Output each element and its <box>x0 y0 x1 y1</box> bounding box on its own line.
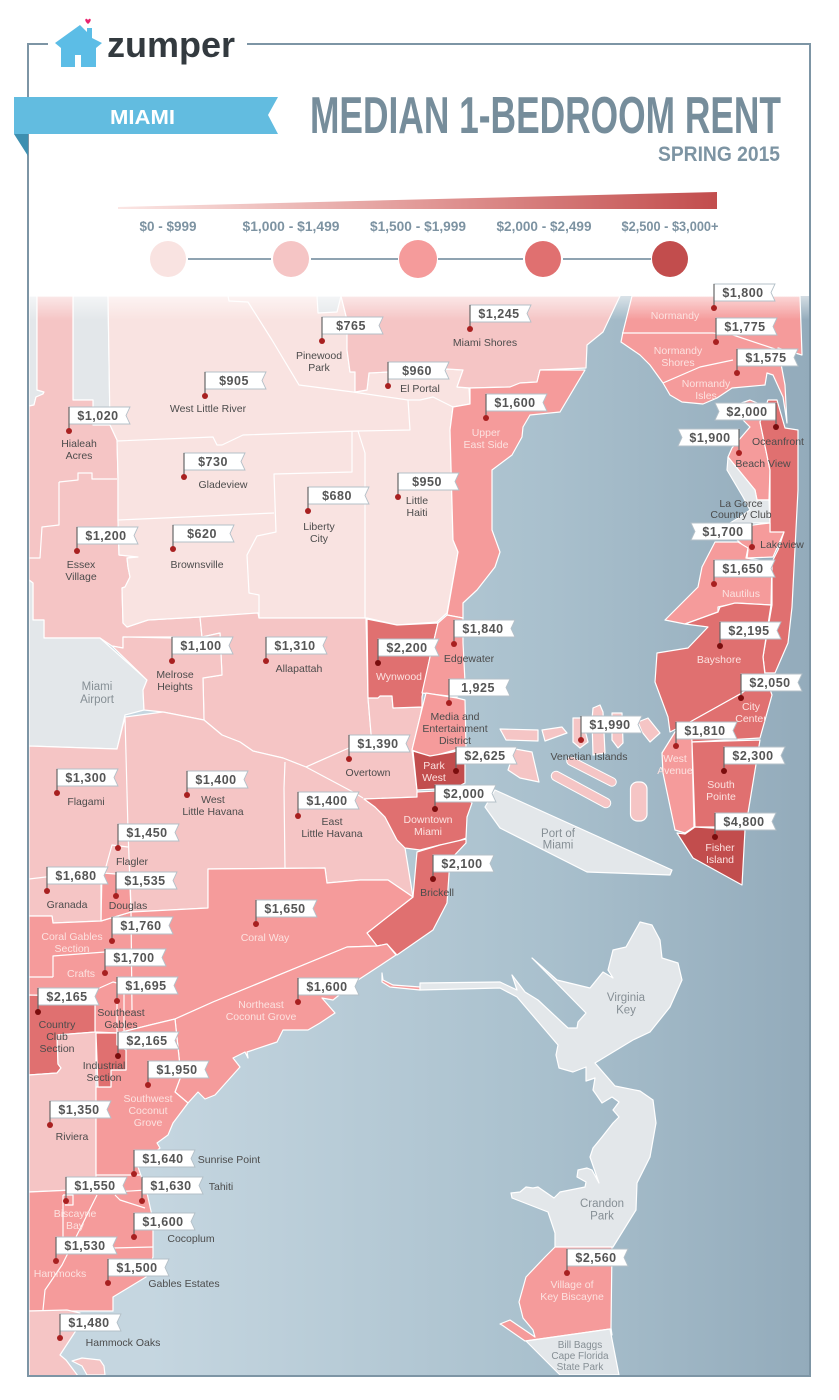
flag: Hammocks <box>53 1237 117 1264</box>
region: inlet strip <box>382 973 420 990</box>
region: Virginia Key and Crandon Park <box>420 922 682 1247</box>
label: South Pointe: South <box>707 779 735 791</box>
label: Industrial Section: Section <box>86 1072 122 1084</box>
label: Bill Baggs Cape Florida State Park: Cape Florida <box>551 1351 609 1362</box>
flag: Nautilus <box>711 560 775 587</box>
label: Bill Baggs Cape Florida State Park: State Park <box>557 1362 604 1373</box>
flag: Brickell <box>430 855 494 882</box>
label: Port of Miami: Miami <box>543 840 573 852</box>
flag: Douglas: $1,535 <box>124 874 166 888</box>
flag: Flagler: $1,450 <box>126 826 168 840</box>
flag: West Little Havana: $1,400 <box>195 773 237 787</box>
region: under $1000 north-central districts <box>108 296 470 627</box>
flag: Miami Shores <box>467 305 531 332</box>
label: Gables Estates: Gables Estates <box>148 1278 220 1290</box>
flag: Melrose Heights <box>169 637 233 664</box>
region: Melrose Heights <box>112 633 222 720</box>
flag: East Little Havana <box>295 792 359 819</box>
flag: Coral Gables Section: $1,760 <box>120 919 162 933</box>
label: Gladeview: Gladeview <box>198 479 248 491</box>
flag: Granada: $1,680 <box>55 869 97 883</box>
flag: Normandy: $1,800 <box>722 286 764 300</box>
flag: Melrose Heights: $1,100 <box>180 639 222 653</box>
legend item: $2,000 - $2,499: $2,000 - $2,499 <box>496 218 592 234</box>
region: Country Club Section <box>29 995 95 1075</box>
label: Melrose Heights: Melrose <box>156 669 194 681</box>
flag: Industrial Section <box>115 1032 179 1059</box>
flag: West Little River: $905 <box>219 374 249 388</box>
region: grey north-west areas <box>29 296 44 406</box>
flag: Cocoplum: $1,600 <box>142 1215 184 1229</box>
label: Virginia Key: Key <box>616 1004 636 1016</box>
flag: Oceanfront <box>715 403 779 430</box>
label: Country Club Section: Club <box>46 1031 68 1043</box>
wordmark: zumper <box>107 24 235 65</box>
label: Coral Gables Section: Coral Gables <box>41 931 103 943</box>
flag: Fisher Island: $4,800 <box>723 815 765 829</box>
region: grey patch above Pinewood Park <box>317 296 341 313</box>
flag: Riviera: $1,350 <box>58 1103 100 1117</box>
label: Normandy Shores: Shores <box>661 357 695 369</box>
label: Essex Village: Essex <box>67 559 95 571</box>
flag: Park West <box>453 747 517 774</box>
flag: Allapattah <box>263 637 327 664</box>
flag: Hialeah Acres <box>66 407 130 434</box>
label: West Avenue: Avenue <box>657 765 693 777</box>
region: Beach View <box>728 400 770 500</box>
flag: Fisher Island <box>712 813 776 840</box>
region: Northeast Coconut Grove <box>175 944 396 1103</box>
logo: zumper <box>55 19 235 67</box>
label: Oceanfront: Oceanfront <box>752 436 804 448</box>
flag: Tahiti <box>139 1177 203 1204</box>
flag: Douglas <box>113 872 177 899</box>
flag: Pinewood Park <box>319 317 383 344</box>
label: Little Haiti: Haiti <box>406 507 428 519</box>
flag: West Avenue: $1,810 <box>684 724 726 738</box>
flag: West Little River <box>202 372 266 399</box>
label: Southeast Gables: Gables <box>104 1019 138 1031</box>
region: Village of Key Biscayne <box>500 1247 612 1341</box>
region: Coral Way and Coral Gables <box>29 868 413 1033</box>
flag: Country Club Section <box>35 988 99 1015</box>
flag: Crafts <box>102 949 166 976</box>
flag: Normandy <box>711 284 775 311</box>
label: Riviera: Riviera <box>56 1131 88 1143</box>
legend item: $0 - $999 <box>140 218 197 277</box>
legend item: $2,500 - $3,000+ <box>622 218 718 277</box>
flag: Industrial Section: $2,165 <box>126 1034 168 1048</box>
label: Crafts: Crafts <box>67 968 95 980</box>
label: Pinewood Park: Pinewood <box>296 350 342 362</box>
flag: Gables Estates: $1,500 <box>116 1261 158 1275</box>
region: South Pointe <box>692 740 760 830</box>
flag: Flagler <box>115 824 179 851</box>
flag: Liberty City: $680 <box>322 489 352 503</box>
region: Downtown Miami <box>364 790 472 850</box>
flag: Crafts: $1,700 <box>113 951 155 965</box>
label: Virginia Key: Virginia <box>607 992 645 1004</box>
flag: City Center <box>738 674 802 701</box>
subtitle: SPRING 2015 <box>658 143 780 166</box>
map: price flags <box>35 284 802 1341</box>
flag: Venetian Islands <box>578 716 642 743</box>
label: Flagler: Flagler <box>116 856 149 868</box>
flag: El Portal <box>385 362 449 389</box>
label: Tahiti: Tahiti <box>209 1181 233 1193</box>
label: Hammocks: Hammocks <box>34 1268 86 1280</box>
label: Little Haiti: Little <box>406 495 428 507</box>
flag: Edgewater <box>451 620 515 647</box>
label: Granada: Granada <box>47 899 88 911</box>
label: East Little Havana: Little Havana <box>301 828 363 840</box>
flag: Gladeview: $730 <box>198 455 228 469</box>
region: Wynwood <box>367 619 438 708</box>
label: Industrial Section: Industrial <box>83 1060 125 1072</box>
label: La Gorce Country Club: La Gorce <box>719 498 763 510</box>
region: Nautilus <box>665 542 772 624</box>
label: Lakeview: Lakeview <box>760 539 804 551</box>
map: neighbourhood regions <box>29 296 802 1376</box>
label: Upper East Side: East Side <box>464 439 509 451</box>
label: Normandy Isles: Normandy <box>682 378 730 390</box>
label: West Avenue: West <box>663 753 687 765</box>
label: Fisher Island: Fisher <box>705 842 735 854</box>
label: Park West: West <box>422 772 446 784</box>
flag: Southeast Gables <box>114 977 178 1004</box>
flag: Wynwood <box>375 639 439 666</box>
label: Normandy: Normandy <box>651 310 700 322</box>
flag: Southwest Coconut Grove <box>145 1061 209 1088</box>
label: Miami Shores: Miami Shores <box>453 337 517 349</box>
flag: Biscayne Bay: $1,550 <box>74 1179 116 1193</box>
flag: West Little Havana <box>184 771 248 798</box>
flag: Tahiti: $1,630 <box>150 1179 192 1193</box>
legend: price scale <box>140 218 718 278</box>
flag: South Pointe: $2,300 <box>732 749 774 763</box>
label: Bayshore: Bayshore <box>697 654 741 666</box>
flag: Miami Shores: $1,245 <box>478 307 520 321</box>
flag: Gables Estates <box>105 1259 169 1286</box>
label: Media and Entertainment District: Media and <box>430 711 480 723</box>
label: Hialeah Acres: Hialeah <box>61 438 97 450</box>
label: City Center: City <box>742 701 760 713</box>
ribbon: Miami <box>14 97 278 156</box>
flag: East Little Havana: $1,400 <box>306 794 348 808</box>
flag: Normandy Shores: $1,775 <box>724 320 766 334</box>
flag: South Pointe <box>721 747 785 774</box>
map: neighbourhood labels <box>34 310 804 1373</box>
label: Normandy Shores: Normandy <box>654 345 702 357</box>
map: water background <box>28 296 810 1376</box>
region: Media and Entertainment District <box>412 693 466 757</box>
map: fade at top edge <box>29 296 809 320</box>
flag: Country Club Section: $2,165 <box>46 990 88 1004</box>
label: Pinewood Park: Park <box>308 362 331 374</box>
legend item: $0 - $999: $0 - $999 <box>140 218 197 234</box>
label: Essex Village: Village <box>65 571 97 583</box>
region: Bayshore <box>655 603 771 732</box>
region: Douglas <box>101 873 131 921</box>
label: Liberty City: Liberty <box>303 521 335 533</box>
region: Normandy group <box>621 296 802 423</box>
region: Hammock Oaks <box>29 1310 80 1376</box>
ribbon: Miami: MIAMI <box>110 106 175 129</box>
flag: Venetian Islands: $1,990 <box>589 718 631 732</box>
flag: Hialeah Acres: $1,020 <box>77 409 119 423</box>
label: Edgewater: Edgewater <box>444 653 495 665</box>
flag: Coral Way <box>253 900 317 927</box>
label: Coral Gables Section: Section <box>54 943 90 955</box>
flag: Normandy Isles <box>734 349 798 376</box>
label: Crandon Park: Crandon <box>580 1198 624 1210</box>
region: Allapattah <box>200 613 372 767</box>
region: Bill Baggs Cape Florida State Park <box>526 1329 619 1375</box>
region: Fisher Island <box>677 827 745 885</box>
flag: Flagami: $1,300 <box>65 771 107 785</box>
label: West Little Havana: Little Havana <box>182 806 244 818</box>
label: Hammock Oaks: Hammock Oaks <box>86 1337 160 1349</box>
label: Port of Miami: Port of <box>541 828 575 840</box>
flag: Cocoplum <box>131 1213 195 1240</box>
label: Liberty City: City <box>310 533 329 545</box>
flag: Oceanfront: $2,000 <box>726 405 768 419</box>
label: East Little Havana: East <box>321 816 343 828</box>
label: Normandy Isles: Isles <box>695 390 717 402</box>
label: Village of Key Biscayne: Key Biscayne <box>540 1291 604 1303</box>
region: La Gorce Country Club <box>727 457 770 523</box>
region: Miami Airport <box>29 580 147 749</box>
label: Miami Airport: Airport <box>80 694 115 706</box>
label: West Little River: West Little River <box>170 403 247 415</box>
label: Coral Way: Coral Way <box>241 932 290 944</box>
label: La Gorce Country Club: Country Club <box>710 509 772 521</box>
label: Venetian Islands: Venetian Islands <box>550 751 628 763</box>
flag: Village of Key Biscayne: $2,560 <box>575 1251 617 1265</box>
label: Southeast Gables: Southeast <box>97 1007 145 1019</box>
flag: Bayshore <box>717 622 781 649</box>
label: Melrose Heights: Heights <box>157 681 193 693</box>
label: Upper East Side: Upper <box>472 427 500 439</box>
label: Country Club Section: Country <box>39 1019 75 1031</box>
flag: El Portal: $960 <box>402 364 432 378</box>
flag: Nautilus: $1,650 <box>722 562 764 576</box>
flag: Gladeview <box>181 453 245 480</box>
label: City Center: Center <box>735 713 767 725</box>
region: City Center <box>690 675 772 742</box>
label: Brownsville: Brownsville <box>170 559 224 571</box>
flag: Little Haiti <box>395 473 459 500</box>
flag: Lakeview: $1,700 <box>702 525 744 539</box>
flag: Normandy Shores <box>713 318 777 345</box>
flag: Pinewood Park: $765 <box>336 319 366 333</box>
flag: Essex Village: $1,200 <box>85 529 127 543</box>
label: Biscayne Bay: Biscayne <box>54 1208 96 1220</box>
flag: Upper East Side: $1,600 <box>494 396 536 410</box>
label: Flagami: Flagami <box>67 796 105 808</box>
flag: Hammock Oaks: $1,480 <box>68 1316 110 1330</box>
flag: Hammock Oaks <box>57 1314 121 1341</box>
region: Brickell <box>367 839 466 955</box>
legend item: $1,000 - $1,499: $1,000 - $1,499 <box>242 218 340 234</box>
region: Upper East Side <box>447 370 585 618</box>
flag: Sunrise Point: $1,640 <box>142 1152 184 1166</box>
label: Miami Airport: Miami <box>82 681 112 693</box>
label: Downtown Miami: Downtown <box>403 814 453 826</box>
region: south coastal neighbourhoods <box>29 1019 188 1311</box>
map: neighbourhood boundary lines <box>29 296 778 1310</box>
flag: Northeast Coconut Grove <box>295 978 359 1005</box>
region: Edgewater <box>422 615 465 697</box>
label: Park West: Park <box>423 760 445 772</box>
flag: Downtown Miami <box>432 785 496 812</box>
flag: Village of Key Biscayne <box>564 1249 628 1276</box>
region: Industrial Section <box>96 1033 126 1087</box>
region: Hialeah Acres and Essex Village <box>29 296 202 648</box>
label: Southwest Coconut Grove: Coconut <box>128 1105 168 1117</box>
flag: Riviera <box>47 1101 111 1128</box>
legend: gradient wedge <box>118 192 717 209</box>
flag: West Avenue <box>673 722 737 749</box>
flag: Downtown Miami: $2,000 <box>443 787 485 801</box>
label: Bill Baggs Cape Florida State Park: Bill Baggs <box>558 1340 602 1351</box>
flag: Coral Gables Section <box>109 917 173 944</box>
region: Park West <box>413 748 465 790</box>
flag: Liberty City <box>305 487 369 514</box>
label: Media and Entertainment District: Entertainment <box>422 723 488 735</box>
flag: Northeast Coconut Grove: $1,600 <box>306 980 348 994</box>
flag: Coral Way: $1,650 <box>264 902 306 916</box>
region: coastal islet <box>72 1358 105 1375</box>
flag: Granada <box>44 867 108 894</box>
label: Village of Key Biscayne: Village of <box>550 1279 594 1291</box>
label: Overtown: Overtown <box>346 767 391 779</box>
flag: Edgewater: $1,840 <box>462 622 504 636</box>
flag: Little Haiti: $950 <box>412 475 442 489</box>
label: Country Club Section: Section <box>39 1043 75 1055</box>
label: Northeast Coconut Grove: Northeast <box>238 999 284 1011</box>
label: Crandon Park: Park <box>590 1210 614 1222</box>
flag: Upper East Side <box>483 394 547 421</box>
label: Brickell: Brickell <box>420 887 454 899</box>
legend item: $1,000 - $1,499 <box>242 218 340 277</box>
flag: Brownsville: $620 <box>187 527 217 541</box>
flag: Southeast Gables: $1,695 <box>125 979 167 993</box>
label: Southwest Coconut Grove: Grove <box>134 1117 162 1129</box>
label: Wynwood: Wynwood <box>376 671 422 683</box>
flag: Beach View <box>678 429 742 456</box>
icon: house with heart <box>55 19 102 67</box>
region: West Avenue <box>662 722 694 833</box>
label: Media and Entertainment District: District <box>439 735 471 747</box>
flag: Media and Entertainment District: 1,925 <box>461 681 495 695</box>
label: South Pointe: Pointe <box>706 791 736 803</box>
flag: Wynwood: $2,200 <box>386 641 428 655</box>
region: central districts under $1500 <box>29 696 422 923</box>
flag: Park West: $2,625 <box>464 749 506 763</box>
legend item: $1,500 - $1,999 <box>370 218 466 278</box>
flag: Sunrise Point <box>131 1150 195 1177</box>
legend item: $1,500 - $1,999: $1,500 - $1,999 <box>370 218 466 234</box>
region: Lakeview <box>737 523 784 558</box>
flag: Brownsville <box>170 525 234 552</box>
label: West Little Havana: West <box>201 794 225 806</box>
label: Fisher Island: Island <box>706 854 734 866</box>
flag: Flagami <box>54 769 118 796</box>
label: El Portal: El Portal <box>400 383 440 395</box>
flag: Bayshore: $2,195 <box>728 624 770 638</box>
flag: Lakeview <box>691 523 755 550</box>
label: Cocoplum: Cocoplum <box>167 1233 215 1245</box>
flag: Essex Village <box>74 527 138 554</box>
flag: Southwest Coconut Grove: $1,950 <box>156 1063 198 1077</box>
label: Allapattah: Allapattah <box>276 663 323 675</box>
flag: Normandy Isles: $1,575 <box>745 351 787 365</box>
region: Oceanfront strip <box>760 400 798 673</box>
region: Port of Miami <box>485 790 672 875</box>
region: Venetian Islands <box>500 705 660 821</box>
label: Northeast Coconut Grove: Coconut Grove <box>226 1011 296 1023</box>
flag: Beach View: $1,900 <box>689 431 731 445</box>
label: Hialeah Acres: Acres <box>66 450 92 462</box>
label: Beach View: Beach View <box>735 458 791 470</box>
flag: Brickell: $2,100 <box>441 857 483 871</box>
legend item: $2,000 - $2,499 <box>496 218 592 277</box>
region: Riviera <box>29 1032 96 1192</box>
label: Biscayne Bay: Bay <box>66 1220 85 1232</box>
flag: Overtown: $1,390 <box>357 737 399 751</box>
region: Miami Shores <box>341 296 620 392</box>
flag: Biscayne Bay <box>63 1177 127 1204</box>
flag: Hammocks: $1,530 <box>64 1239 106 1253</box>
label: Douglas: Douglas <box>109 900 147 912</box>
flag: Overtown <box>346 735 410 762</box>
label: Downtown Miami: Miami <box>414 826 442 838</box>
label: Sunrise Point: Sunrise Point <box>198 1154 260 1166</box>
flag: Media and Entertainment District <box>446 679 510 706</box>
label: Nautilus: Nautilus <box>722 588 760 600</box>
legend item: $2,500 - $3,000+: $2,500 - $3,000+ <box>622 218 718 234</box>
flag: Allapattah: $1,310 <box>274 639 316 653</box>
flag: City Center: $2,050 <box>749 676 791 690</box>
label: Southwest Coconut Grove: Southwest <box>123 1093 173 1105</box>
